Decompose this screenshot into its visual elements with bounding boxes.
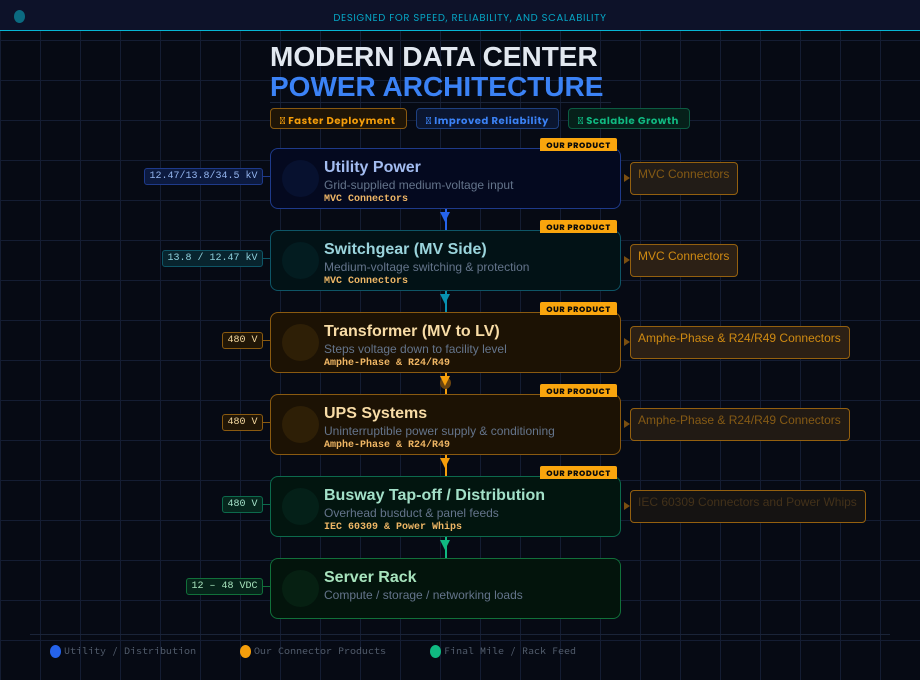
arrow: switchgear to transformer [440, 291, 450, 312]
voltage label: rack [186, 578, 263, 595]
voltage label: switchgear: 13.8 / 12.47 kV [167, 253, 258, 264]
arrow: utility to switchgear [440, 209, 450, 230]
legend [50, 644, 576, 658]
voltage label: transformer: 480 V [227, 335, 258, 346]
voltage label: switchgear [162, 250, 263, 267]
connector arrow 1 [624, 174, 630, 182]
connector box: busway [630, 490, 866, 523]
badge: transformer: OUR PRODUCT [546, 304, 611, 315]
connector arrow 3 [624, 338, 630, 346]
connector arrow 5 [624, 502, 630, 510]
pill: faster deployment:  Faster Deployment [280, 113, 395, 128]
arrow: transformer to ups [440, 373, 451, 394]
pill: scalable growth:  Scalable Growth [578, 113, 679, 128]
arrow: busway to rack [440, 537, 450, 558]
panel: server rack [270, 558, 621, 619]
title [270, 41, 611, 103]
heading: switchgear: Switchgear (MV Side) [324, 241, 487, 258]
description: busway: Overhead busduct & panel feeds [324, 506, 499, 520]
legend: connector: Our Connector Products [254, 644, 386, 657]
connector: ups: Amphe-Phase & R24/R49 [324, 440, 450, 451]
connector box: utility: MVC Connectors [638, 167, 729, 181]
legend: utility: Utility / Distribution [64, 644, 196, 657]
voltage label: busway [222, 496, 263, 513]
voltage label: rack: 12 – 48 VDC [191, 581, 258, 592]
description: switchgear: Medium-voltage switching & protection [324, 260, 529, 274]
description: ups: Uninterruptible power supply & conditioning [324, 424, 555, 438]
connector: transformer: Amphe-Phase & R24/R49 [324, 358, 450, 369]
description: transformer: Steps voltage down to facility level [324, 342, 507, 356]
status dot [14, 10, 25, 23]
panel: busway [270, 476, 621, 537]
pill: improved reliability:  Improved Reliability [426, 113, 549, 128]
pill: scalable growth [568, 108, 690, 129]
badge: ups: OUR PRODUCT [546, 386, 611, 397]
connector box: transformer: Amphe-Phase & R24/R49 Connectors [638, 331, 841, 345]
panel: ups [270, 394, 621, 455]
connector arrow 4 [624, 420, 630, 428]
connector: utility: MVC Connectors [324, 194, 408, 205]
panel: utility power [270, 148, 621, 209]
connector box: ups [630, 408, 850, 441]
voltage label: ups: 480 V [227, 417, 258, 428]
title line 2: POWER ARCHITECTURE [270, 71, 603, 102]
footer rule [30, 634, 890, 635]
description: rack: Compute / storage / networking loads [324, 588, 523, 602]
connector box: switchgear [630, 244, 738, 277]
heading: transformer: Transformer (MV to LV) [324, 323, 500, 340]
voltage label: ups [222, 414, 263, 431]
connector box: busway: IEC 60309 Connectors and Power Whips [638, 495, 857, 509]
legend: rack: Final Mile / Rack Feed [444, 644, 576, 657]
arrow: ups to busway [440, 455, 450, 476]
description: utility: Grid-supplied medium-voltage input [324, 178, 513, 192]
connector: switchgear: MVC Connectors [324, 276, 408, 287]
heading: busway: Busway Tap-off / Distribution [324, 487, 545, 504]
panel: switchgear [270, 230, 621, 291]
badge: busway: OUR PRODUCT [546, 468, 611, 479]
heading: ups: UPS Systems [324, 405, 427, 422]
badge: switchgear: OUR PRODUCT [546, 222, 611, 233]
connector box: utility [630, 162, 738, 195]
header bar [0, 0, 920, 31]
voltage label: transformer [222, 332, 263, 349]
voltage label: utility: 12.47/13.8/34.5 kV [149, 171, 258, 182]
badge: utility: OUR PRODUCT [546, 140, 611, 151]
voltage label: busway: 480 V [227, 499, 258, 510]
connector arrow 2 [624, 256, 630, 264]
connector: busway: IEC 60309 & Power Whips [324, 522, 462, 533]
connector box: transformer [630, 326, 850, 359]
pill: faster deployment [270, 108, 407, 129]
connector box: switchgear: MVC Connectors [638, 249, 729, 263]
header tagline: DESIGNED FOR SPEED, RELIABILITY, AND SCALABILITY [333, 10, 607, 25]
heading: rack: Server Rack [324, 569, 417, 586]
title line 1: MODERN DATA CENTER [270, 41, 598, 72]
connector box: ups: Amphe-Phase & R24/R49 Connectors [638, 413, 841, 427]
voltage label: utility [144, 168, 263, 185]
heading: utility: Utility Power [324, 159, 421, 176]
panel: transformer [270, 312, 621, 373]
pill: improved reliability [416, 108, 559, 129]
